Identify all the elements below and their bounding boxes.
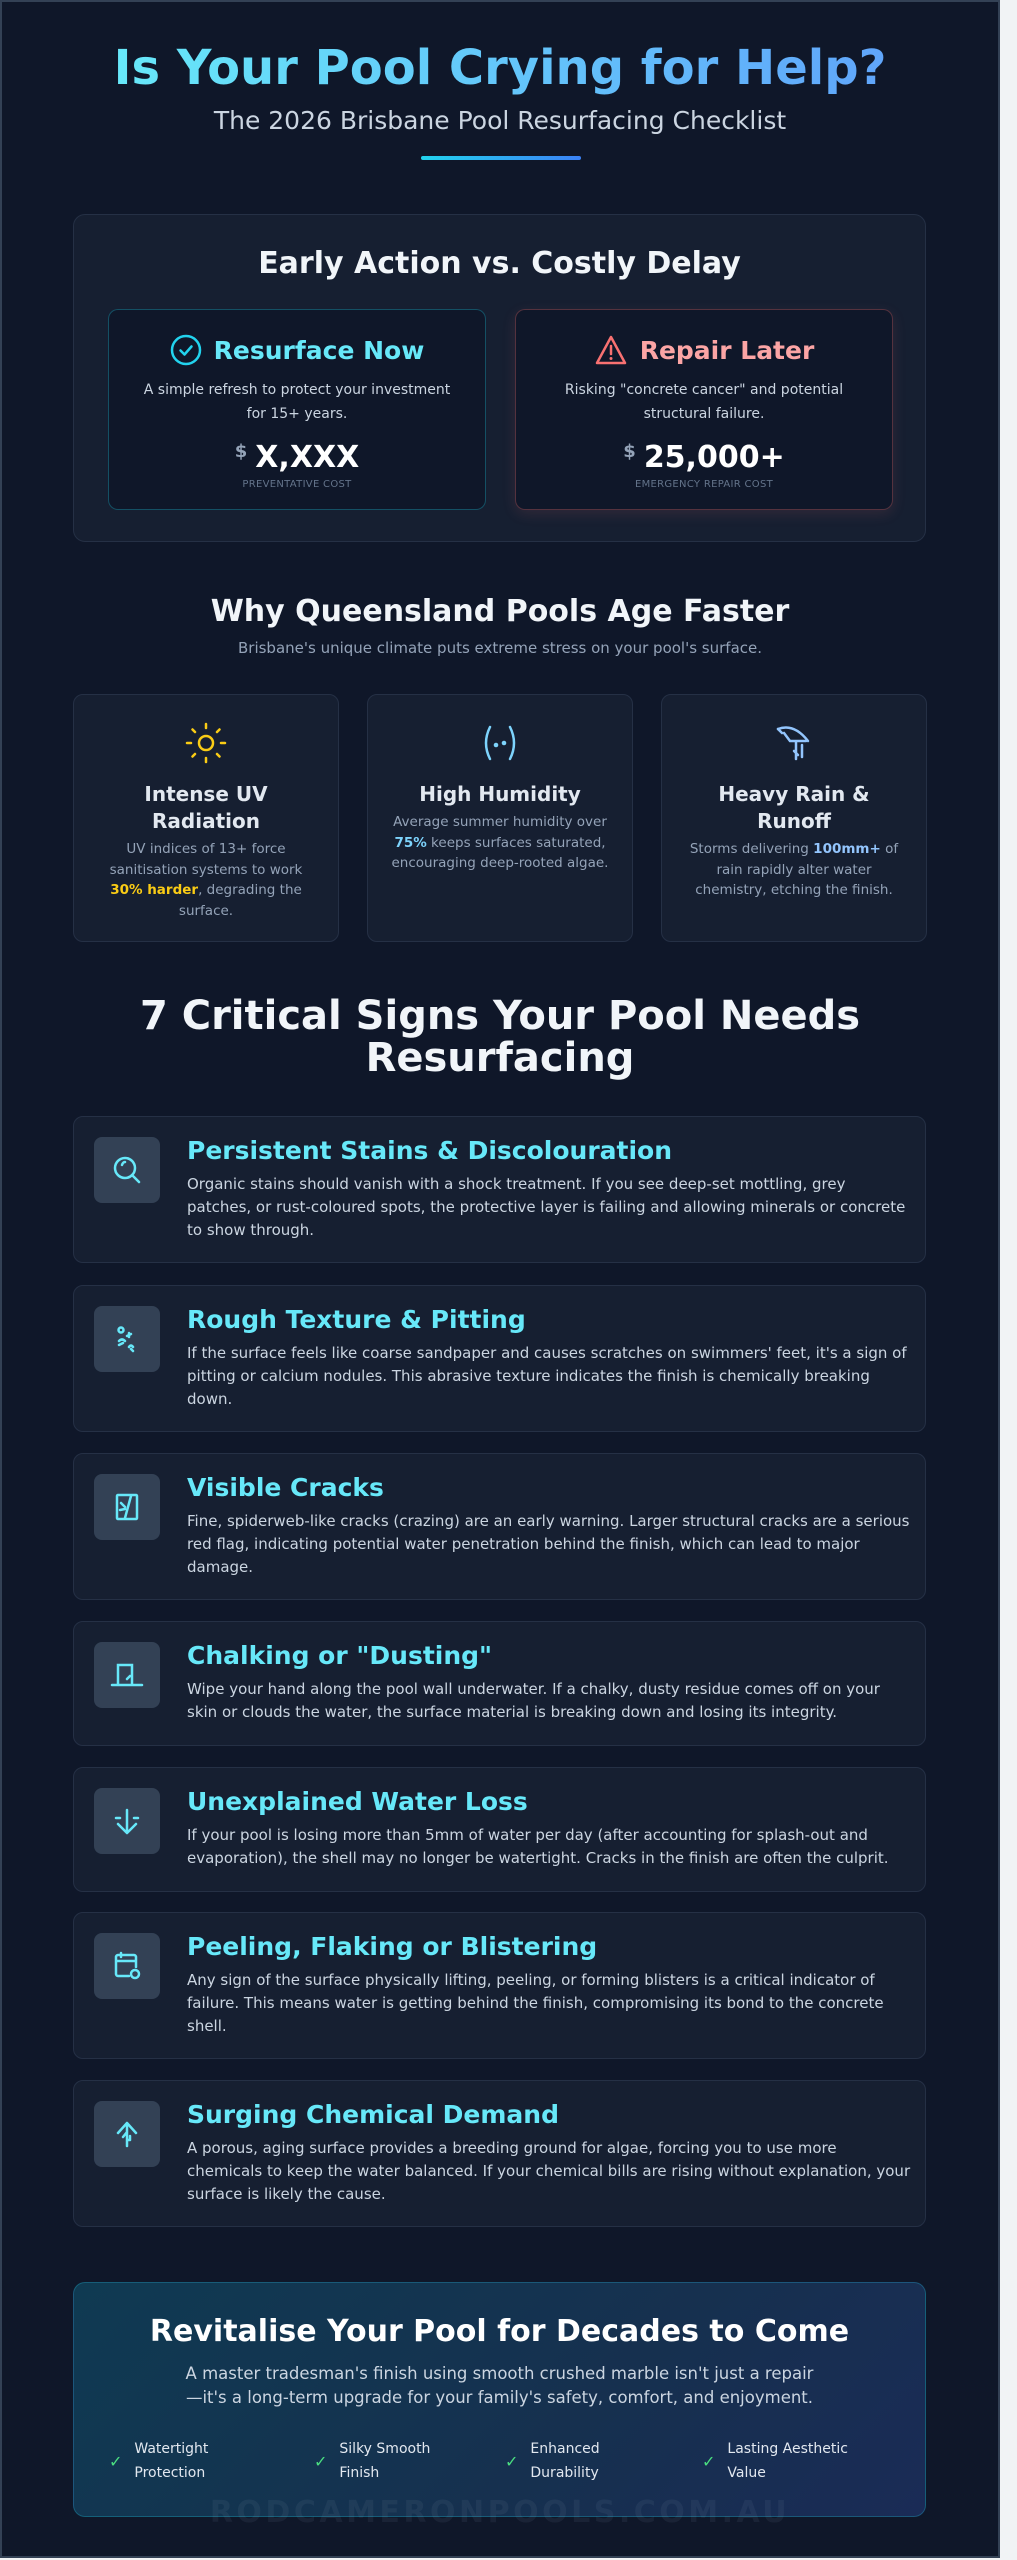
benefit: watertight: ✓ (109, 2452, 122, 2470)
cta text: —it's a long-term upgrade for your family's safety, comfort, and enjoyment. (186, 2388, 813, 2407)
icon: chemical (94, 2101, 160, 2167)
sign 7: A porous, aging surface provides a breeding ground for algae, forcing you to use more chemicals to keep the water balanced. If your chemical bills are rising without explanation, your surface is likely the cause. (187, 2139, 910, 2203)
cta heading: Revitalise Your Pool for Decades to Come (150, 2314, 849, 2349)
sign 6: Any sign of the surface physically lifting, peeling, or forming blisters is a critical indicator of failure. This means water is getting behind the finish, compromising its bond to the concrete shell. (187, 1971, 884, 2035)
sign 4: Wipe your hand along the pool wall underwater. If a chalky, dusty residue comes off on your skin or clouds the water, the surface material is breaking down and losing its integrity. (187, 1680, 880, 1721)
card: resurface now: A simple refresh to protect your investment for 15+ years. (144, 382, 450, 422)
card: intense uv: Intense UV Radiation (144, 782, 268, 833)
sign 2: Rough Texture & Pitting (187, 1305, 526, 1334)
watermark: RODCAMERONPOOLS.COM.AU (210, 2495, 790, 2530)
card: repair later (515, 309, 893, 510)
icon: magnifier (94, 1137, 160, 1203)
sign 1 (73, 1116, 926, 1263)
benefit: watertight: Watertight Protection (134, 2441, 208, 2481)
cta text: A master tradesman's finish using smooth crushed marble isn't just a repair (186, 2364, 813, 2383)
sign 6 (73, 1912, 926, 2059)
icon: rain (776, 726, 810, 760)
card: heavy rain: Storms delivering 100mm+ of rain rapidly alter water chemistry, etching the finish. (690, 841, 898, 898)
card: high humidity: High Humidity (419, 782, 581, 806)
icon: pitting (94, 1306, 160, 1372)
panel heading: Early Action vs. Costly Delay (258, 246, 741, 281)
card: intense uv (73, 694, 339, 942)
heading: 7 critical signs: Resurfacing (366, 1035, 634, 1081)
card: repair later: Risking "concrete cancer" and potential structural failure. (565, 382, 843, 422)
card: repair later: EMERGENCY REPAIR COST (635, 479, 773, 490)
card: heavy rain: Heavy Rain & Runoff (718, 782, 870, 833)
accent line (421, 156, 581, 160)
sign 2: If the surface feels like coarse sandpaper and causes scratches on swimmers' feet, it's a sign of pitting or calcium nodules. This abrasive texture indicates the finish is chemically breaking down. (187, 1344, 907, 1408)
panel: early action vs costly delay (73, 214, 926, 542)
sign 3: Fine, spiderweb-like cracks (crazing) are an early warning. Larger structural cracks are a serious red flag, indicating potential water penetration behind the finish, which can lead to major damage. (187, 1512, 910, 1576)
icon: humidity (484, 726, 516, 760)
benefit: aesthetic: ✓ (702, 2452, 715, 2470)
sign 5 (73, 1767, 926, 1892)
sign 3 (73, 1453, 926, 1600)
icon: blister (94, 1933, 160, 1999)
subheading: Brisbane's unique climate puts extreme stress on your pool's surface. (238, 639, 762, 657)
sign 1: Persistent Stains & Discolouration (187, 1136, 672, 1165)
card: repair later: Repair Later (640, 336, 814, 364)
sign 4: Chalking or "Dusting" (187, 1641, 492, 1670)
card: resurface now (108, 309, 486, 510)
sign 4 (73, 1621, 926, 1746)
heading: 7 critical signs (140, 993, 860, 1081)
sign 5: Unexplained Water Loss (187, 1787, 528, 1816)
sign 1: Organic stains should vanish with a shock treatment. If you see deep-set mottling, grey patches, or rust-coloured spots, the protective layer is failing and allowing minerals or concrete to show through. (187, 1175, 905, 1239)
sign 6: Peeling, Flaking or Blistering (187, 1932, 597, 1961)
sign 2 (73, 1285, 926, 1432)
icon: crack (94, 1474, 160, 1540)
title: Is Your Pool Crying for Help? (114, 40, 886, 96)
card: high humidity: Average summer humidity over 75% keeps surfaces saturated, encouraging deep-rooted algae. (392, 814, 608, 871)
card: heavy rain (661, 694, 927, 942)
card: resurface now: $ X,XXX (235, 440, 359, 475)
card: high humidity (367, 694, 633, 942)
panel: call to action (73, 2282, 926, 2517)
sign 3: Visible Cracks (187, 1473, 384, 1502)
sign 7: Surging Chemical Demand (187, 2100, 559, 2129)
card: resurface now: Resurface Now (214, 336, 424, 364)
subtitle: The 2026 Brisbane Pool Resurfacing Checklist (214, 106, 786, 135)
card: resurface now: PREVENTATIVE COST (242, 479, 352, 490)
icon: chalking (94, 1642, 160, 1708)
icon: sun (186, 722, 226, 764)
sign 5: If your pool is losing more than 5mm of water per day (after accounting for splash-out and evaporation), the shell may no longer be watertight. Cracks in the finish are often the culprit. (187, 1826, 889, 1867)
heading: why queensland pools age faster: Why Queensland Pools Age Faster (211, 594, 789, 629)
icon: water loss (94, 1788, 160, 1854)
card: intense uv: UV indices of 13+ force sanitisation systems to work 30% harder, degrading the surface. (110, 841, 302, 918)
benefit: silky: ✓ (314, 2452, 327, 2470)
sign 7 (73, 2080, 926, 2227)
benefit: aesthetic: Lasting Aesthetic Value (727, 2441, 848, 2481)
benefit: silky: Silky Smooth Finish (339, 2441, 430, 2481)
benefit: durability: ✓ (505, 2452, 518, 2470)
cta text (186, 2364, 814, 2407)
card: repair later: $ 25,000+ (623, 440, 785, 475)
heading: 7 critical signs: 7 Critical Signs Your Pool Needs (140, 993, 860, 1039)
benefit: durability: Enhanced Durability (530, 2441, 600, 2481)
